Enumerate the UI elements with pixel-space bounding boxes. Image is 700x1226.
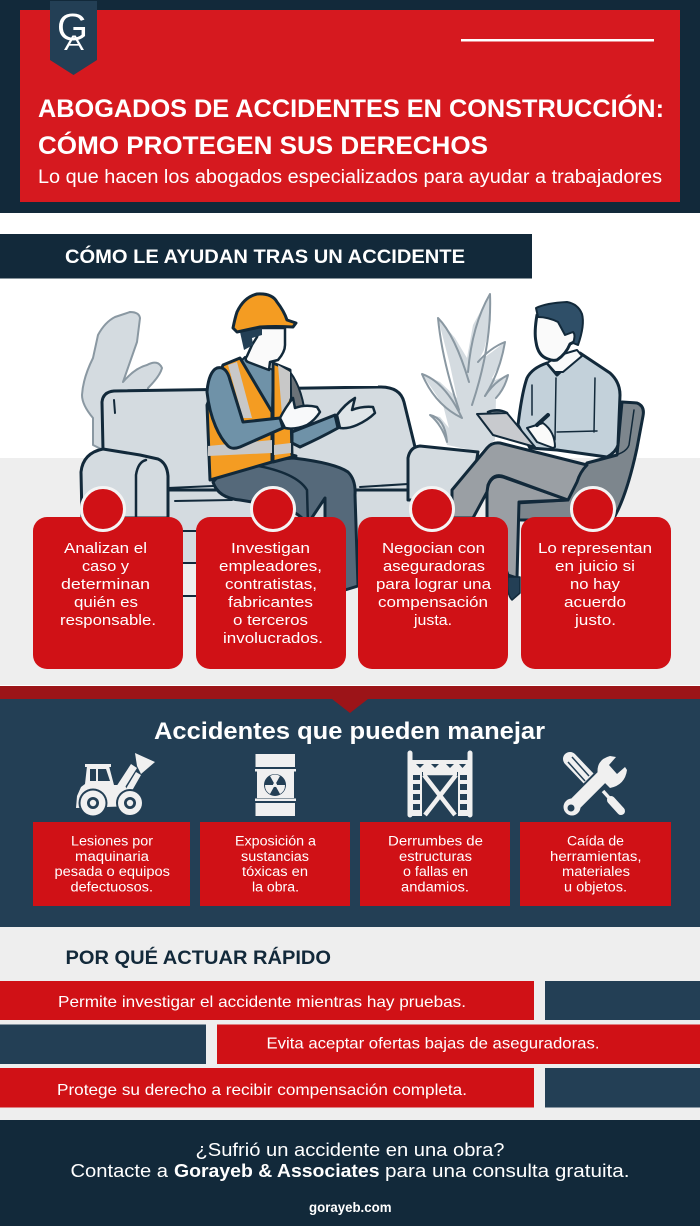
lower leg [487, 477, 568, 578]
panel: accidents [0, 686, 700, 927]
panel: why act fast [0, 927, 700, 1120]
plant left [82, 312, 162, 450]
footer call to action: Gorayeb & Associates [174, 1161, 380, 1181]
far sleeve [290, 372, 304, 420]
step card 4: en juicio si [555, 558, 635, 575]
accident box 2 [200, 822, 350, 906]
shoe [508, 577, 520, 600]
step card 4: no hay [570, 576, 621, 593]
hand and pen [527, 423, 555, 448]
icon: wheel loader [76, 753, 155, 818]
accident box 3: estructuras [399, 849, 472, 864]
footer call to action: para una consulta gratuita. [385, 1161, 630, 1181]
step card 1: determinan [61, 576, 150, 593]
thigh [452, 443, 587, 518]
illustration: worker and lawyer on sofa [81, 294, 643, 600]
icon: wrench and screwdriver [564, 756, 627, 816]
near arm [207, 368, 283, 448]
section heading: how they help [0, 234, 532, 278]
accident box 2: sustancias [241, 849, 309, 864]
step card 2: o terceros [233, 612, 308, 629]
far hand [337, 398, 375, 428]
footer call to action: Contacte a [70, 1161, 169, 1181]
worker [207, 294, 375, 590]
tee [240, 357, 273, 412]
step card 2: fabricantes [228, 594, 313, 611]
step card 1: Analizan el [64, 540, 147, 557]
heading: accidents: Accidentes que pueden manejar [154, 718, 545, 745]
accident box 3: andamios. [401, 880, 469, 894]
near hand [280, 398, 320, 429]
accident box 4 [520, 822, 671, 906]
sofa [81, 387, 478, 596]
step card 3: Negocian con [382, 540, 485, 557]
accident box 4: Caída de [567, 834, 624, 848]
step card 2 [196, 488, 346, 669]
step card 1: caso y [82, 558, 130, 575]
step card 3 [358, 488, 508, 669]
neck and face [246, 328, 285, 370]
step card 4: justo. [574, 612, 616, 629]
title [38, 93, 664, 160]
panel: how they help [0, 294, 700, 685]
step card 4: acuerdo [564, 594, 626, 611]
accident box 3 [360, 822, 510, 906]
accident box 1: Lesiones por [71, 834, 154, 848]
footer call to action [0, 1120, 700, 1226]
step card 2: Investigan [231, 540, 310, 557]
plant right [422, 294, 508, 452]
step card 1 [33, 488, 183, 669]
accident box 3: Derrumbes de [388, 834, 483, 848]
accident box 1: maquinaria [75, 849, 150, 864]
section heading: how they help: CÓMO LE AYUDAN TRAS UN ACCIDENTE [65, 244, 465, 268]
heading: why act fast: POR QUÉ ACTUAR RÁPIDO [66, 946, 331, 969]
title: CÓMO PROTEGEN SUS DERECHOS [38, 130, 488, 160]
step card 2: involucrados. [223, 630, 323, 647]
step card 2: contratistas, [225, 576, 317, 593]
footer call to action: ¿Sufrió un accidente en una obra? [196, 1140, 504, 1160]
accident box 2: la obra. [252, 880, 299, 894]
accident box 2: Exposición a [235, 834, 317, 848]
logo ribbon: A [64, 32, 84, 55]
accident box 3: o fallas en [403, 864, 468, 879]
accident box 4: materiales [562, 864, 630, 879]
icon: toxic barrel [255, 754, 296, 816]
accident box 1 [33, 822, 190, 906]
step card 1: quién es [74, 594, 138, 611]
step card 4: Lo representan [538, 540, 652, 557]
step card 1: responsable. [60, 612, 156, 629]
footer call to action: gorayeb.com [309, 1200, 392, 1215]
subtitle: Lo que hacen los abogados especializados para ayudar a trabajadores [38, 167, 662, 188]
legs [213, 458, 358, 590]
armchair [516, 402, 643, 520]
logo ribbon: G [57, 7, 88, 49]
title: ABOGADOS DE ACCIDENTES EN CONSTRUCCIÓN: [38, 93, 664, 123]
shirt [518, 353, 620, 457]
reason bar 2 [0, 1024, 700, 1064]
step card 3: compensación [378, 594, 488, 611]
header panel [0, 0, 700, 213]
reason bar 3 [0, 1068, 700, 1108]
accident box 1: pesada o equipos [54, 864, 170, 879]
accident box 2: tóxicas en [242, 864, 308, 879]
step card 3: aseguradoras [383, 558, 485, 575]
reason bar 2: Evita aceptar ofertas bajas de aseguradoras. [266, 1036, 600, 1052]
reason bar 1: Permite investigar el accidente mientras hay pruebas. [58, 994, 466, 1011]
clipboard [477, 413, 535, 447]
logo ribbon [50, 1, 97, 75]
accident box 4: u objetos. [564, 880, 627, 894]
step card 2: empleadores, [219, 558, 322, 575]
neck and head [547, 350, 582, 372]
helmet [233, 294, 296, 332]
icon: scaffold [408, 753, 472, 816]
accident box 4: herramientas, [550, 849, 642, 864]
lawyer [452, 302, 643, 600]
reason bar 3: Protege su derecho a recibir compensación completa. [57, 1082, 467, 1099]
step card 4 [521, 488, 671, 669]
step card 3: para lograr una [376, 576, 492, 593]
reason bar 1 [0, 981, 700, 1020]
vest [207, 358, 272, 480]
step card 3: justa. [413, 612, 452, 629]
accident box 1: defectuosos. [70, 880, 153, 894]
